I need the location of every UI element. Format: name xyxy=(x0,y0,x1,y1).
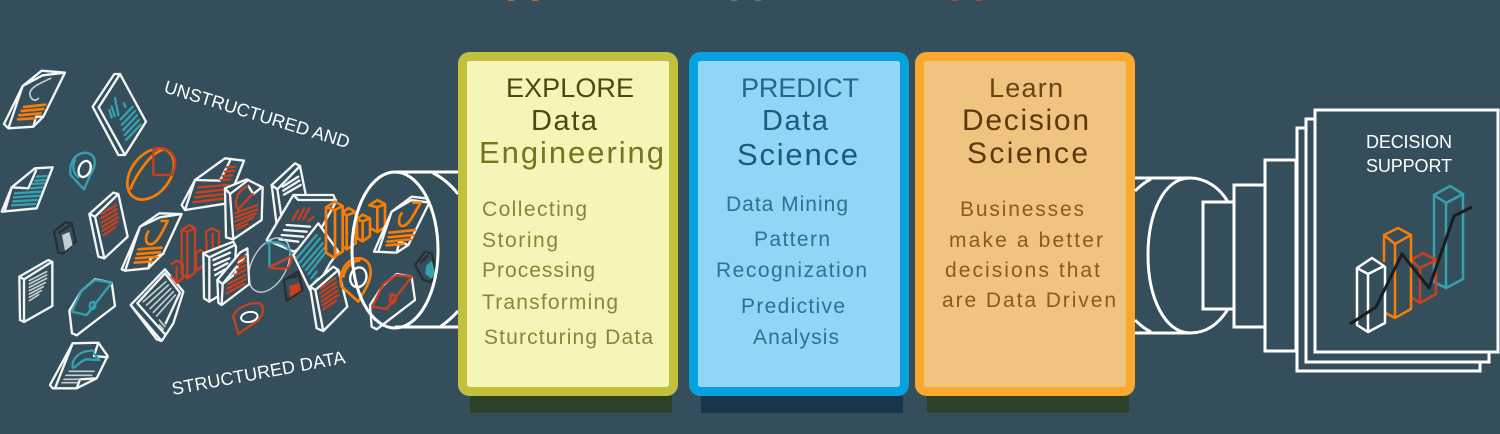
list: Storing xyxy=(482,229,558,252)
heading: Learn xyxy=(989,73,1063,103)
list: Data Mining xyxy=(726,193,848,216)
icon: red location pin xyxy=(233,303,263,334)
icon: document with orange curve right xyxy=(374,197,429,253)
icon: red bar chart xyxy=(172,225,219,283)
top edge icon remnants xyxy=(508,0,982,1)
icon: dark and teal memory card xyxy=(415,252,437,282)
list: Collecting xyxy=(482,198,587,221)
icon: red lined document xyxy=(310,267,347,331)
icon: document with orange curve xyxy=(122,213,182,271)
panel box xyxy=(462,56,674,392)
list xyxy=(942,198,1116,312)
heading: EXPLORE xyxy=(506,73,634,103)
list xyxy=(482,198,653,349)
panel box xyxy=(694,56,904,392)
label: structured data: STRUCTURED DATA xyxy=(170,347,347,399)
list: Pattern xyxy=(754,228,830,251)
list: Predictive xyxy=(741,295,845,318)
panel: decision support document stack xyxy=(1297,110,1498,371)
panel: predict data science xyxy=(694,56,904,413)
list: decisions that xyxy=(945,259,1100,282)
heading: Data xyxy=(531,105,598,137)
icon: red envelope xyxy=(370,274,415,329)
panel shadow xyxy=(927,396,1129,413)
icon: document with red curve xyxy=(225,179,263,239)
list: Transforming xyxy=(482,291,618,314)
panel box xyxy=(920,56,1130,392)
icon: document red lines xyxy=(89,193,128,258)
icon: teal location pin xyxy=(70,153,95,189)
heading: Decision xyxy=(962,104,1089,137)
heading xyxy=(479,73,664,170)
icon: orange location pin xyxy=(341,258,371,302)
list: Sturcturing Data xyxy=(484,326,653,349)
icon: folder document red xyxy=(182,158,244,210)
panel: learn decision science xyxy=(920,56,1130,413)
heading xyxy=(962,73,1089,170)
label: unstructured and: UNSTRUCTURED AND xyxy=(162,77,352,152)
icon: large report document xyxy=(267,195,336,252)
list: Businesses xyxy=(960,198,1084,221)
icon: document with teal curve xyxy=(50,343,108,388)
list: make a better xyxy=(949,229,1103,252)
right cylinder funnel xyxy=(1135,178,1228,333)
heading: decision support xyxy=(1366,132,1452,176)
icon: orange bar chart xyxy=(326,200,385,257)
icon: gray pie chart xyxy=(240,231,298,299)
left cylinder funnel xyxy=(352,172,458,328)
heading: Science xyxy=(967,137,1088,170)
heading: PREDICT xyxy=(741,73,859,103)
heading: Data xyxy=(762,105,829,137)
scattered data icons, left group xyxy=(2,71,184,388)
heading xyxy=(737,73,859,172)
heading: Science xyxy=(737,137,858,172)
stepped connector rectangles xyxy=(1203,160,1296,351)
icon: folder document teal xyxy=(2,167,53,212)
panel shadow xyxy=(470,396,672,413)
list: Analysis xyxy=(753,326,839,349)
bar and line chart xyxy=(1350,186,1472,332)
icon: book with teal chart xyxy=(93,74,146,155)
list: Processing xyxy=(482,259,595,282)
icon: white lined document xyxy=(272,163,307,227)
icon: stacked white and red documents xyxy=(203,242,249,305)
icon: dark memory card xyxy=(54,222,76,253)
icon: orange pie chart xyxy=(118,140,184,208)
heading: decision support: SUPPORT xyxy=(1366,156,1452,176)
icon: white document xyxy=(19,260,52,322)
list: are Data Driven xyxy=(942,289,1116,312)
panel shadow xyxy=(701,396,903,413)
icon: folded document orange xyxy=(4,71,65,128)
panel: explore data engineering xyxy=(462,56,674,413)
scattered data icons, centre group xyxy=(172,158,437,334)
icon: teal envelope xyxy=(69,279,115,335)
list: Recognization xyxy=(716,259,867,282)
icon: teal lined book xyxy=(293,223,338,292)
heading: decision support: DECISION xyxy=(1366,132,1452,152)
list xyxy=(716,193,867,349)
heading: Engineering xyxy=(479,135,664,170)
icon: gray book xyxy=(131,269,183,341)
icon: dark and red memory card xyxy=(284,272,303,301)
